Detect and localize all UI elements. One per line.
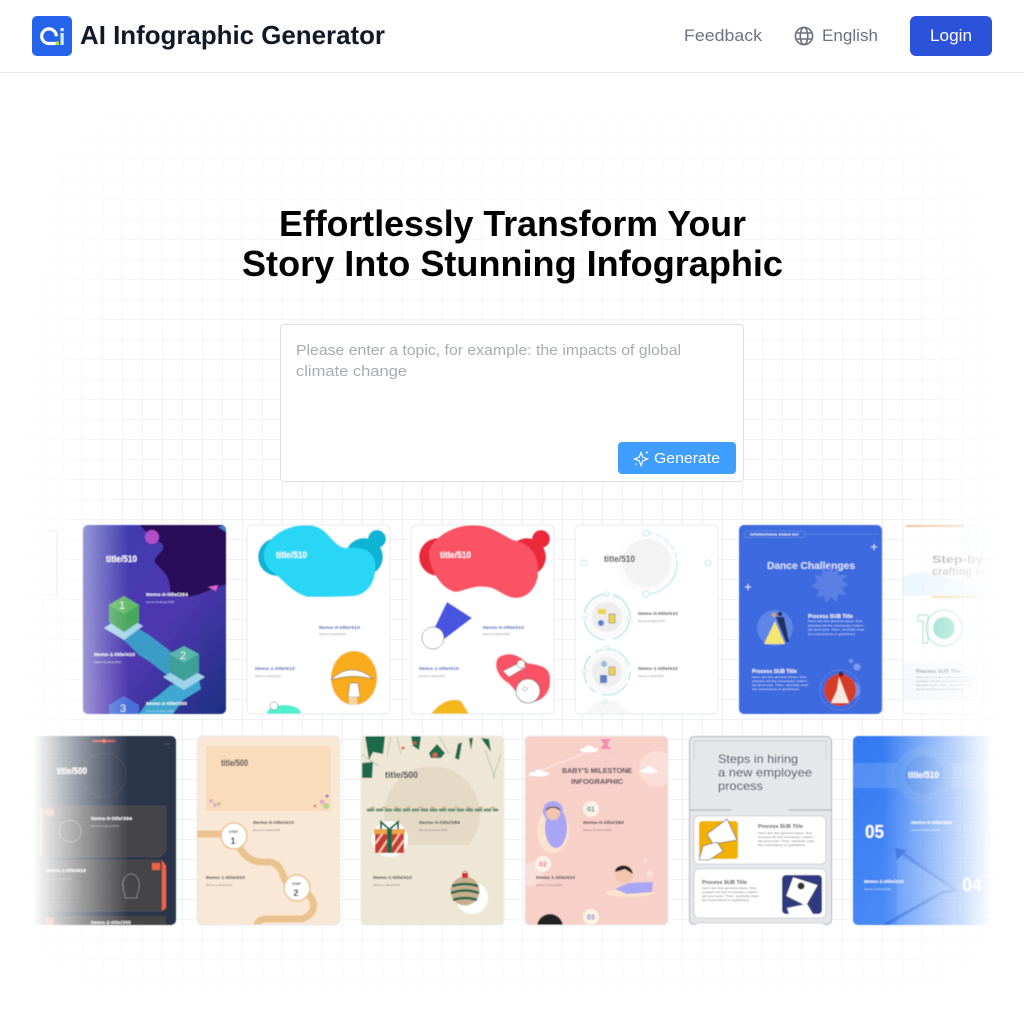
card: isometric stairs: 2 (180, 650, 186, 662)
card: cream steps: Items-0-title/410 (253, 820, 295, 825)
card: isometric stairs: Items-0-title/284 (146, 592, 189, 597)
card: blue arrows: Items-0-title/284 (911, 820, 953, 825)
card: cyan blob: title/510 (276, 550, 307, 560)
card: cyan blob: Items-0-title/410 (319, 625, 361, 630)
card: blue arrows: Items-1-title/410 (864, 879, 904, 884)
card: cream steps (197, 736, 340, 926)
card: isometric stairs: title/510 (106, 554, 137, 564)
card: dance challenges: als and tools. Then, carefully read (752, 683, 808, 687)
card: dance challenges: INTERNATIONAL DANCE DAY (750, 532, 799, 536)
topic input box (280, 324, 744, 482)
card: step by step crafting: als and tools. Then, carefully read (916, 683, 972, 687)
card: dance challenges (739, 525, 882, 714)
generate button (618, 442, 736, 474)
card: step by step crafting: Process SUB Title (916, 669, 961, 675)
card: cream steps: Items-1-desc/310 (206, 883, 233, 887)
card: step by step crafting (904, 524, 986, 699)
card: steps in hiring: als and tools. Then, carefully read (758, 839, 814, 843)
card: cream steps: STEP (229, 830, 239, 834)
cubes (108, 604, 140, 632)
card: cream steps: title/500 (221, 758, 248, 768)
card: isometric stairs: Items-0-desc/318 (146, 600, 175, 604)
card: cream steps: Items-0-desc/318 (253, 828, 281, 832)
hero heading (242, 203, 783, 284)
card: isometric stairs (83, 525, 226, 715)
hero heading: Story Into Stunning Infographic (242, 243, 783, 284)
login button (910, 16, 992, 56)
card: red blob: Items-0-title/410 (483, 625, 525, 630)
card: dance challenges: prepare all the necessary materi- (808, 624, 864, 628)
card: christmas (361, 736, 504, 925)
card: christmas: Items-0-desc/318 (419, 828, 448, 832)
card: blue arrows: title/510 (908, 770, 939, 780)
card: ghost notebook template (46, 530, 58, 686)
card: baby's milestone: BABY'S MILESTONE (562, 768, 632, 775)
card: cyan blob: Items-1-title/410 (255, 666, 295, 671)
card: isometric stairs: 1 (119, 600, 125, 612)
card: steps in hiring: Process SUB Title (758, 824, 803, 830)
card: isometric stairs: 3 (120, 703, 126, 715)
card: dark tech: Items-1-title/410 (46, 868, 86, 873)
card: red blob: Items-1-title/410 (419, 666, 459, 671)
garland (368, 808, 497, 810)
template gallery (0, 525, 1024, 940)
card: christmas: Items-1-title/410 (373, 875, 412, 880)
card: dark tech: Items-2-title/355 (91, 920, 131, 925)
platforms (104, 622, 144, 640)
card: baby's milestone: 01 (587, 806, 595, 814)
card: dark tech: Items-1-desc/310 (46, 877, 73, 881)
card: steps in hiring: Here are the general steps: first, (702, 886, 757, 890)
card: baby's milestone (526, 736, 668, 926)
card: blue arrows (853, 736, 996, 925)
brand name: AI Infographic Generator (80, 20, 385, 50)
nav: feedback: Feedback (684, 26, 763, 45)
card: cream steps: 2 (294, 888, 299, 898)
card: dance challenges: prepare all the necessary materi- (752, 679, 808, 683)
card: isometric stairs: Items-1-title/410 (94, 652, 136, 657)
card: cyan blob: Items-0-desc/310 (319, 632, 347, 636)
card: ring timeline: Items-0-title/410 (638, 611, 678, 616)
stairs (124, 628, 172, 675)
card: steps in hiring: process (718, 779, 763, 793)
card: dark tech: title/500 (57, 766, 87, 776)
card: cyan blob (247, 525, 390, 721)
card: steps in hiring (689, 736, 832, 933)
card: step by step crafting: Here are the general steps: first, (916, 675, 971, 679)
card: dance challenges: Process SUB Title (808, 614, 853, 620)
card: dance challenges: Dance Challenges (767, 560, 855, 572)
icon: globe (795, 27, 813, 45)
card: step by step crafting: Step-by-step (932, 554, 1017, 566)
card: cyan blob: Items-1-desc/310 (255, 674, 282, 678)
icon: logo (32, 16, 72, 56)
card: dark tech: Items-0-desc/318 (91, 824, 120, 828)
card: cream steps: Items-1-title/410 (206, 875, 245, 880)
card: red blob: Items-0-desc/310 (483, 632, 511, 636)
card: steps in hiring: the instructions or guidelines. (702, 898, 750, 902)
nav: language: English (822, 26, 878, 45)
card: christmas: title/500 (385, 770, 418, 780)
generate button: Generate (654, 450, 720, 467)
card: isometric stairs: Items-2-desc/384 (146, 709, 175, 713)
foliage (362, 736, 491, 778)
card: steps in hiring: als and tools. Then, carefully read (702, 894, 758, 898)
card: christmas: Items-0-title/284 (419, 820, 461, 825)
card: steps in hiring: prepare all the necessary materi- (702, 890, 758, 894)
card: blue arrows: Items-1-desc/310 (864, 887, 892, 891)
hero heading: Effortlessly Transform Your (279, 203, 746, 244)
card: ring timeline: Items-1-desc/310 (638, 674, 665, 678)
card: cream steps: STEP (292, 882, 302, 886)
card: dance challenges: als and tools. Then, carefully read (808, 628, 864, 632)
card: blue arrows: 04 (962, 875, 982, 895)
card: baby's milestone: Items-0-title/284 (583, 820, 625, 825)
card: ring timeline: Items-0-desc/310 (638, 619, 666, 623)
card: isometric stairs: Items-1-desc/310 (94, 660, 122, 664)
placeholder text: climate change (296, 363, 407, 380)
background grid (78, 259, 946, 947)
card: blue arrows: Items-0-desc/318 (911, 828, 940, 832)
card: dance challenges: Here are the general steps: first, (752, 675, 807, 679)
card: red blob: Items-1-desc/310 (419, 674, 446, 678)
card: step by step crafting: crafting process (932, 566, 1017, 578)
card: steps in hiring: prepare all the necessary materi- (758, 835, 814, 839)
card: blue arrows: 05 (865, 822, 884, 842)
card: ring timeline: Items-1-title/410 (638, 666, 678, 671)
card: red blob (411, 525, 554, 714)
card: isometric stairs: Items-2-title/390 (146, 701, 188, 706)
card: dance challenges: Here are the general steps: first, (808, 619, 863, 623)
card: steps in hiring: Process SUB Title (702, 880, 747, 886)
card: baby's milestone: Items-0-desc/318 (583, 828, 612, 832)
card: steps in hiring: Steps in hiring (718, 752, 798, 766)
card: ring timeline (576, 526, 718, 714)
card: baby's milestone: Items-1-desc/310 (536, 883, 564, 887)
card: baby's milestone: 02 (539, 862, 547, 868)
card: ring timeline: title/510 (604, 554, 635, 564)
card: step by step crafting: the instructions or guidelines. (916, 687, 964, 691)
card: steps in hiring: Here are the general steps: first, (758, 831, 813, 835)
card outlines (197, 525, 1024, 925)
card: steps in hiring: a new employee (718, 766, 812, 780)
card: red blob: title/510 (440, 550, 471, 560)
placeholder text: Please enter a topic, for example: the impacts of global (296, 342, 681, 359)
card: baby's milestone: Items-1-title/410 (536, 875, 575, 880)
card: step by step crafting: prepare all the necessary materi- (916, 679, 972, 683)
card: baby's milestone: INFOGRAPHIC (571, 779, 623, 786)
header bar (0, 0, 1024, 73)
card: dance challenges: the instructions or guidelines. (752, 687, 800, 691)
card: christmas: Items-1-desc/310 (373, 883, 401, 887)
card: dance challenges: the instructions or guidelines. (808, 632, 856, 636)
card: cream steps: 1 (230, 836, 236, 846)
icon: sparkle (634, 452, 648, 466)
card: dark tech: Items-0-title/394 (91, 816, 133, 821)
placeholder text (296, 342, 681, 380)
card: dark tech (33, 736, 176, 925)
card: dance challenges: Process SUB Title (752, 669, 797, 675)
card: steps in hiring: the instructions or guidelines. (758, 843, 806, 847)
card: baby's milestone: 03 (587, 914, 595, 922)
login button: Login (930, 26, 972, 45)
